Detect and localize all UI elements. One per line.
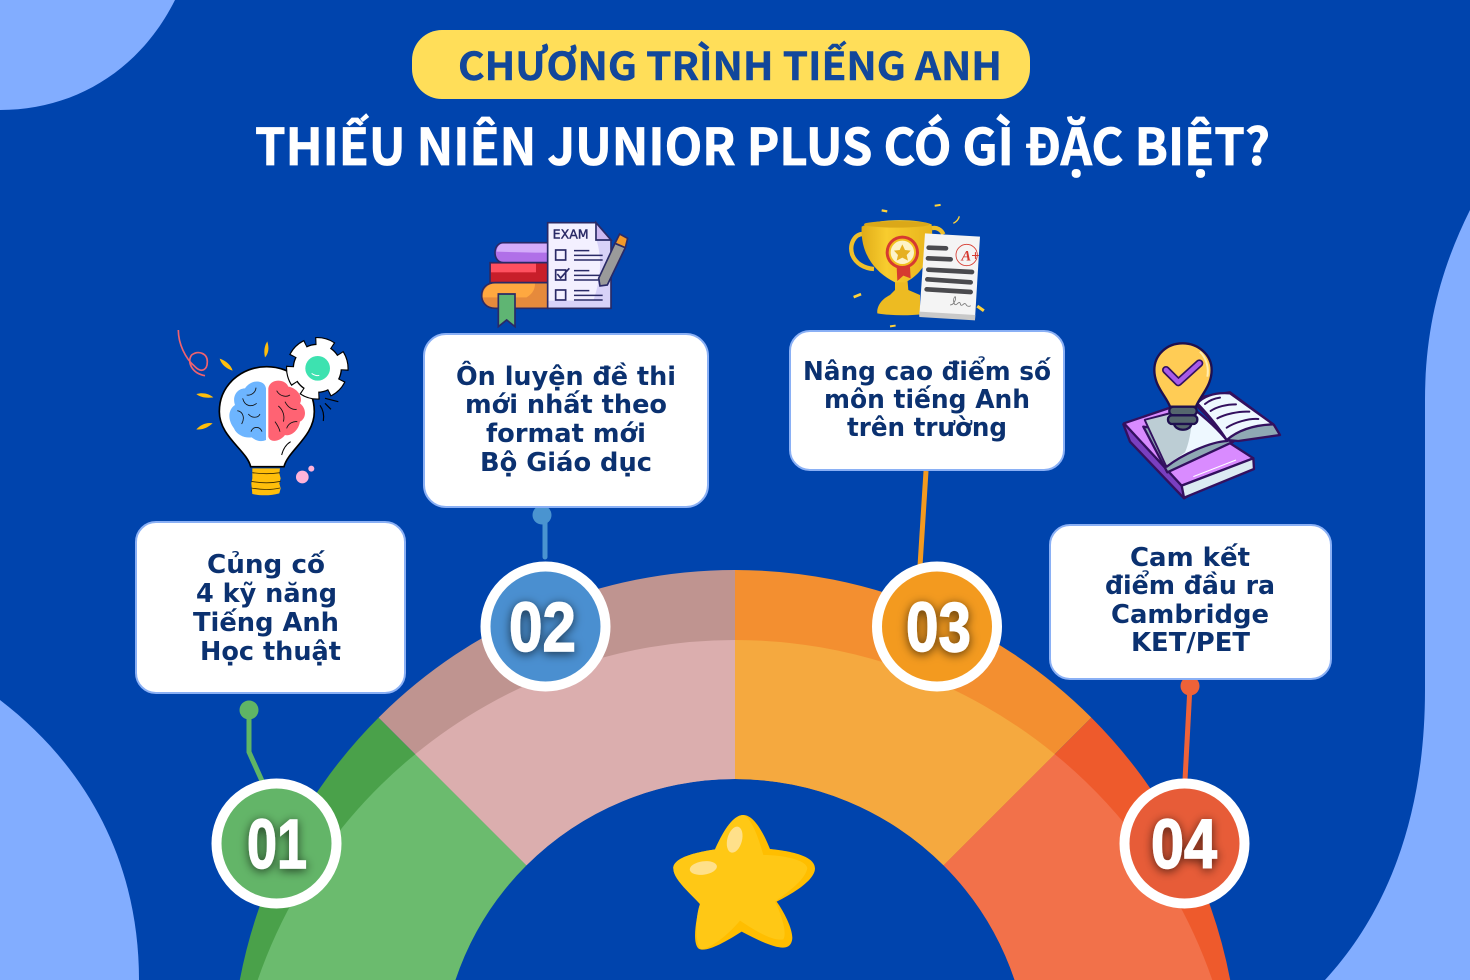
card 4 text: [1105, 543, 1275, 658]
card 2 text: [456, 361, 676, 478]
semicircle chart: [240, 570, 1230, 980]
card 4: [1050, 525, 1331, 679]
card 2: [424, 334, 708, 507]
segment: pink: [379, 570, 735, 865]
inner band: red: [944, 754, 1212, 980]
card 3: [790, 331, 1064, 470]
card 3 text: Nâng cao điểm số: [803, 356, 1051, 387]
card 2 text: Ôn luyện đề thi: [456, 361, 676, 392]
connector 03: [920, 471, 926, 566]
inner band: orange: [735, 640, 1055, 865]
icon: trophy and graded paper: A+: [960, 249, 979, 265]
inner band: pink: [415, 640, 735, 865]
card 4 text: Cambridge: [1111, 600, 1269, 630]
icon: exam paper with books: [482, 223, 628, 327]
number badge 04: [1124, 784, 1244, 904]
card 3 text: [803, 356, 1051, 443]
number 04: 04: [1151, 805, 1217, 883]
inner band: green: [258, 754, 526, 980]
number 02: 02: [509, 588, 576, 666]
card 1: [136, 522, 405, 693]
decorative corner: bottom left: [0, 700, 139, 980]
card 3 text: môn tiếng Anh: [824, 385, 1030, 415]
connector 02: [532, 506, 552, 557]
icon: exam paper with books: EXAM: [553, 228, 589, 242]
card 1 text: Củng cố: [207, 550, 325, 580]
card 1 text: Học thuật: [200, 637, 341, 667]
main heading: THIẾU NIÊN JUNIOR PLUS CÓ GÌ ĐẶC BIỆT?: [255, 106, 1270, 180]
card 2 text: mới nhất theo: [465, 390, 667, 420]
decorative shape: right side: [1325, 210, 1470, 980]
number badge 03: [877, 566, 997, 686]
card 1 text: Tiếng Anh: [193, 608, 339, 638]
card 2 text: Bộ Giáo dục: [480, 448, 652, 478]
card 3 text: trên trường: [847, 413, 1007, 443]
number badge 01: [216, 784, 336, 904]
card 1 text: [193, 550, 341, 667]
number 03: 03: [906, 588, 971, 666]
segment: red: [944, 718, 1230, 980]
icon: star: [673, 815, 815, 950]
card 4 text: điểm đầu ra: [1105, 570, 1275, 601]
card 1 text: 4 kỹ năng: [196, 579, 337, 609]
card 4 text: Cam kết: [1130, 543, 1250, 573]
number 01: 01: [247, 805, 307, 883]
decorative corner: top left: [0, 0, 175, 110]
connector 01: [240, 700, 267, 792]
title pill: [412, 30, 1030, 99]
segment: green: [240, 718, 526, 980]
card 2 text: format mới: [486, 419, 646, 449]
segment: orange: [735, 570, 1091, 865]
icon: light bulb with brain and gear: [178, 330, 348, 495]
card 4 text: KET/PET: [1131, 628, 1251, 658]
pill text: CHƯƠNG TRÌNH TIẾNG ANH: [458, 36, 1002, 92]
icon: trophy and graded paper: [851, 204, 985, 327]
connector 04: [1180, 676, 1200, 780]
number badge 02: [486, 566, 606, 686]
icon: open book with light bulb: [1123, 343, 1280, 498]
